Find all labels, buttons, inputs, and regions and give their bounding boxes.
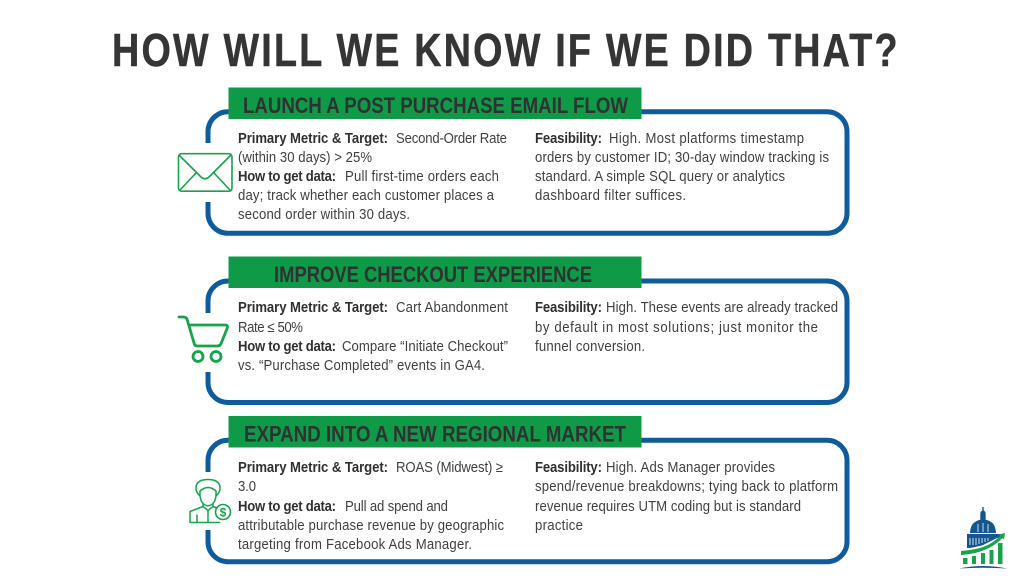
left text: metric and data: How to get data: (238, 497, 336, 514)
card border (208, 440, 847, 562)
right text: feasibility: dashboard filter suffices. (535, 186, 686, 203)
left text: metric and data: 3.0 (238, 477, 256, 494)
card border (208, 281, 847, 402)
right text: feasibility: Feasibility: (535, 458, 602, 475)
banner (228, 416, 642, 448)
left text: metric and data: targeting from Facebook Ads Manager. (238, 535, 472, 552)
right text: feasibility: standard. A simple SQL query or analytics (535, 167, 785, 184)
left text: metric and data: Primary Metric & Target: (238, 298, 388, 315)
left text: metric and data: attributable purchase revenue by geographic (238, 516, 504, 533)
left text: metric and data: Pull first-time orders each (345, 167, 499, 184)
left text: metric and data: second order within 30 days. (238, 205, 410, 222)
left text: metric and data: Rate ≤ 50% (238, 318, 303, 335)
right text: feasibility: orders by customer ID; 30-day window tracking is (535, 148, 829, 165)
banner (228, 88, 642, 119)
panel: checkout experience (179, 256, 847, 402)
left text: metric and data: day; track whether each customer places a (238, 186, 494, 203)
left text: metric and data: vs. “Purchase Completed” events in GA4. (238, 356, 485, 373)
panel: post purchase email flow (178, 88, 847, 233)
left text: metric and data: Cart Abandonment (396, 298, 508, 315)
right text: feasibility: High. Most platforms timestamp (609, 129, 804, 146)
right text: feasibility: spend/revenue breakdowns; tying back to platform (535, 477, 838, 494)
card border (208, 112, 847, 233)
left text: metric and data (238, 129, 507, 222)
right text: feasibility: High. Ads Manager provides (606, 458, 775, 475)
left text: metric and data: How to get data: (238, 167, 336, 184)
icon: person with dollar (190, 472, 230, 530)
banner: IMPROVE CHECKOUT EXPERIENCE (274, 262, 592, 287)
right text: feasibility: Feasibility: (535, 298, 602, 315)
right text: feasibility: by default in most solutions; just monitor the (535, 318, 818, 335)
left text: metric and data: Compare “Initiate Checkout” (342, 337, 508, 354)
icon: capitol dome logo (959, 507, 1007, 568)
left text: metric and data: Primary Metric & Target: (238, 458, 388, 475)
left text: metric and data: Pull ad spend and (345, 497, 448, 514)
left text: metric and data: (within 30 days) > 25% (238, 148, 372, 165)
right text: feasibility: practice (535, 516, 583, 533)
title: HOW WILL WE KNOW IF WE DID THAT? (112, 24, 898, 76)
left text: metric and data: How to get data: (238, 337, 336, 354)
right text: feasibility: revenue requires UTM coding but is standard (535, 497, 801, 514)
left text: metric and data (238, 298, 508, 373)
icon: shopping cart (179, 313, 228, 372)
left text: metric and data: ROAS (Midwest) ≥ (396, 458, 503, 475)
banner: LAUNCH A POST PURCHASE EMAIL FLOW (243, 93, 629, 118)
right text: feasibility (535, 298, 838, 354)
left text: metric and data (238, 458, 504, 552)
left text: metric and data: Second-Order Rate (396, 129, 507, 146)
right text: feasibility: High. These events are already tracked (606, 298, 838, 315)
icon: person with dollar: $ (220, 505, 227, 519)
right text: feasibility (535, 129, 829, 203)
right text: feasibility: Feasibility: (535, 129, 602, 146)
banner (228, 256, 642, 288)
right text: feasibility (535, 458, 838, 533)
icon: envelope (178, 143, 232, 202)
right text: feasibility: funnel conversion. (535, 337, 645, 354)
left text: metric and data: Primary Metric & Target: (238, 129, 388, 146)
banner: EXPAND INTO A NEW REGIONAL MARKET (244, 422, 626, 446)
panel: new regional market (190, 416, 847, 562)
